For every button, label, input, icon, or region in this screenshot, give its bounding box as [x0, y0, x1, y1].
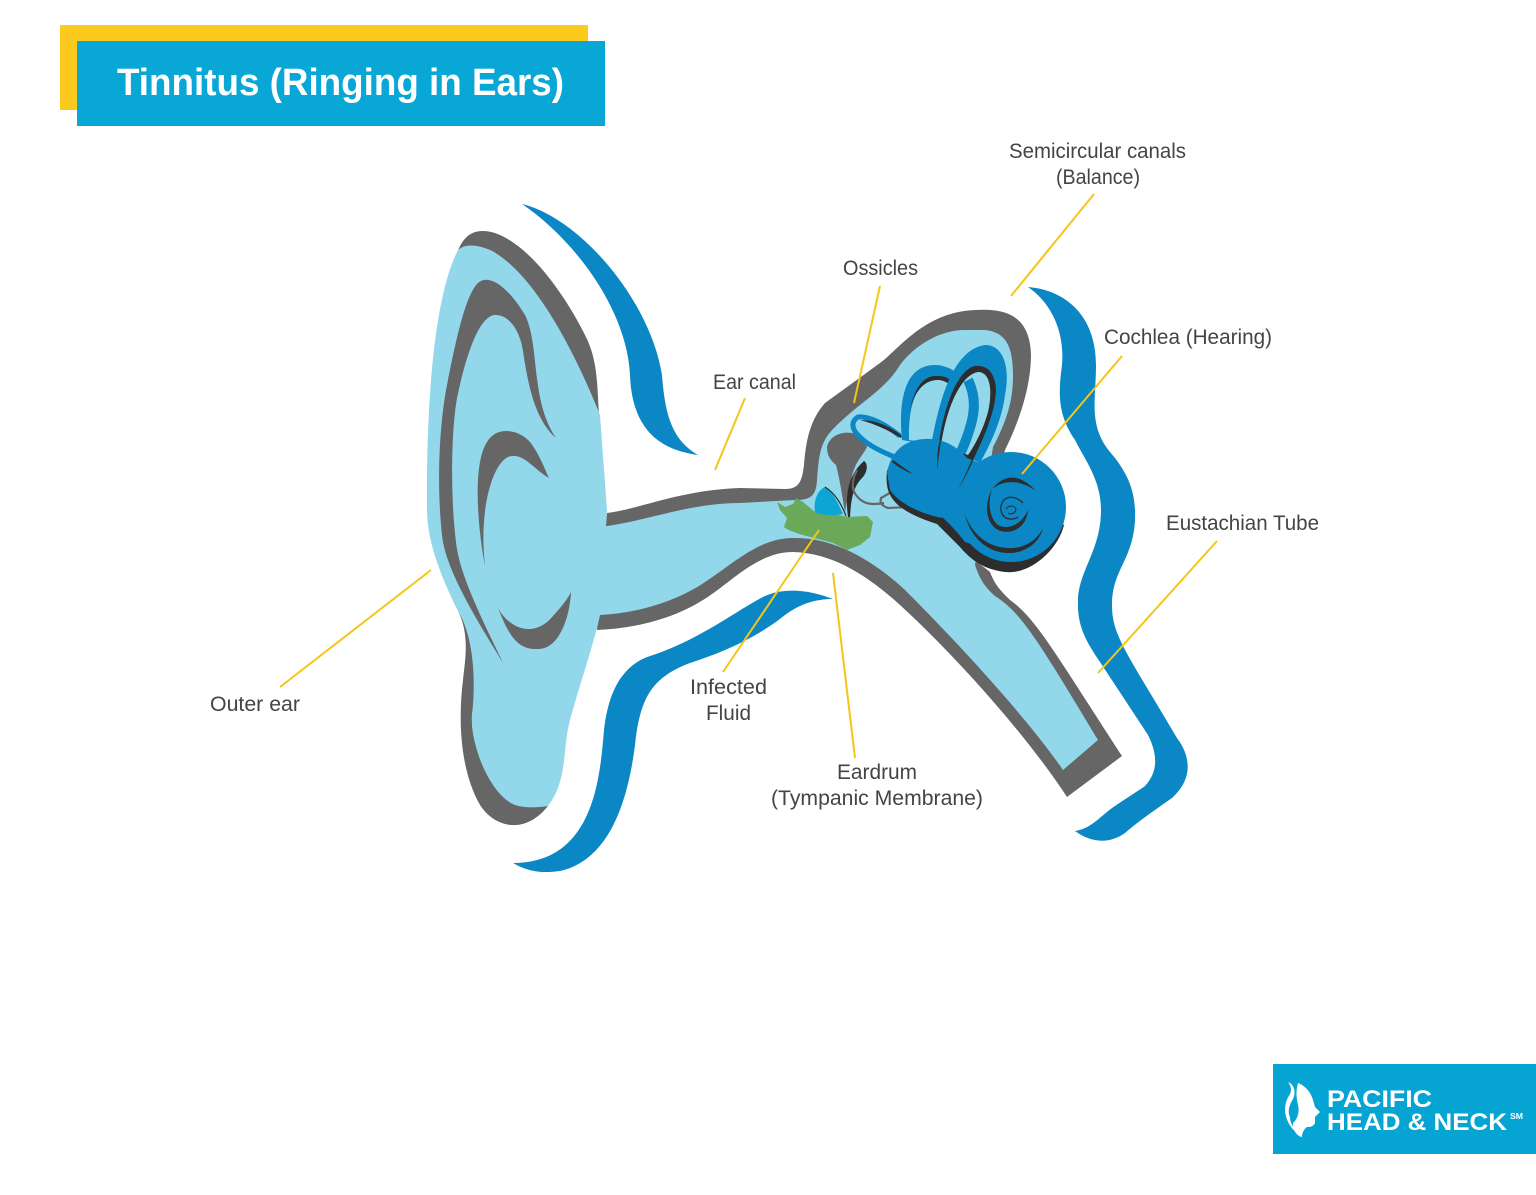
horizontal canal: [853, 417, 900, 458]
logo text: HEAD & NECK: [1327, 1109, 1508, 1136]
label: eardrum: (Tympanic Membrane): [771, 786, 983, 810]
label: ossicles: Ossicles: [843, 256, 918, 280]
logo: Pacific Head & Neck: [1273, 1064, 1536, 1154]
label: infected fluid: [690, 530, 819, 725]
logo text: PACIFIC: [1327, 1086, 1432, 1113]
ear canal and eustachian tube interior: [600, 330, 1098, 770]
outer ear: [427, 231, 607, 825]
label: semicircular canals: (Balance): [1056, 165, 1140, 189]
helix fold: [439, 280, 556, 663]
label: eardrum: [771, 573, 983, 810]
icon: face profile: [1285, 1082, 1320, 1137]
cochlea: [956, 452, 1066, 562]
logo text: [1327, 1086, 1523, 1136]
outer ear top rim: [458, 231, 599, 415]
outer ear skin: [427, 246, 607, 807]
label: cochlea: [1022, 325, 1272, 474]
label: eustachian tube: [1098, 511, 1319, 673]
title banner: [60, 25, 605, 126]
label: outer ear: Outer ear: [210, 692, 300, 716]
label: ear canal: [713, 370, 796, 470]
label: infected fluid: Infected: [690, 675, 767, 699]
label: infected fluid: Fluid: [706, 701, 751, 725]
ear canal and eustachian tube wall: [597, 310, 1122, 797]
label: ossicles: [843, 256, 918, 403]
cochlea shadow: [887, 470, 1064, 572]
infected fluid: [777, 498, 873, 550]
title: Tinnitus (Ringing in Ears): [117, 62, 564, 104]
label: ear canal: Ear canal: [713, 370, 796, 394]
cochlea spiral: [992, 478, 1036, 491]
outer ear lobe rim: [458, 611, 548, 825]
semicircular canals: [853, 345, 1007, 487]
canal junction lines: [892, 460, 913, 474]
anterior canal: [932, 345, 1007, 463]
posterior canal: [901, 365, 977, 450]
label: semicircular canals: [1009, 139, 1186, 296]
ossicles: [827, 433, 908, 517]
logo text: SM: [1510, 1112, 1523, 1121]
swoosh: upper outer ear: [522, 204, 698, 455]
eardrum: [815, 487, 846, 516]
label: outer ear: [210, 570, 431, 716]
antihelix fold: [478, 431, 549, 566]
label: cochlea: Cochlea (Hearing): [1104, 325, 1272, 349]
swoosh: lower canal: [513, 591, 833, 872]
cochlea and vestibule: [887, 439, 1066, 572]
label: semicircular canals: Semicircular canals: [1009, 139, 1186, 163]
lobe crescent: [498, 592, 571, 649]
swoosh: right side: [1028, 287, 1188, 841]
label: eustachian tube: Eustachian Tube: [1166, 511, 1319, 535]
vestibule: [887, 439, 1010, 550]
label: eardrum: Eardrum: [837, 760, 917, 784]
